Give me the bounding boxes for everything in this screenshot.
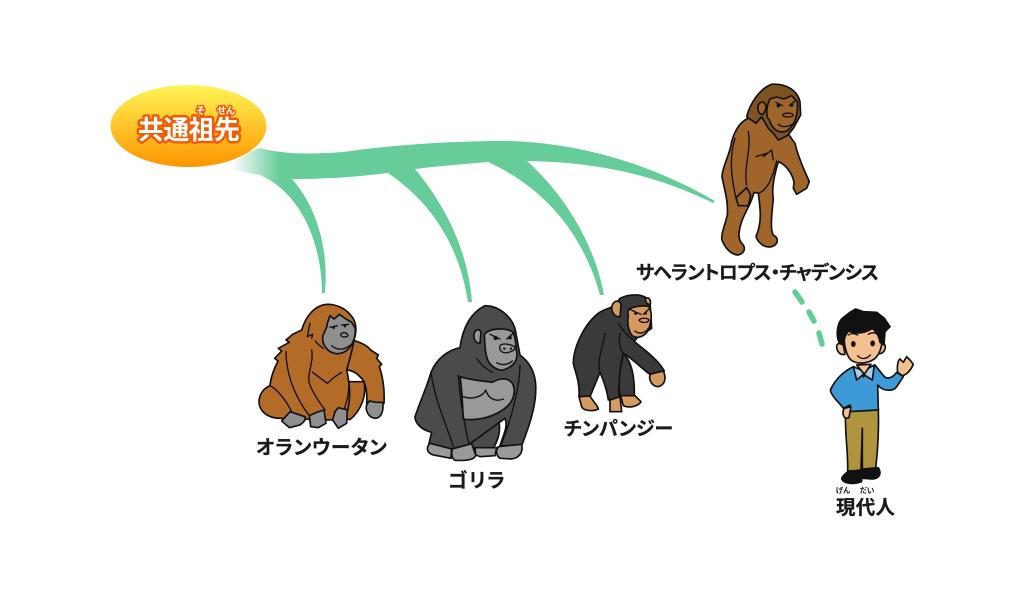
sahelanthropus label: サヘラントロプス・チャデンシス [636,261,879,284]
modern human [830,309,913,483]
gorilla [415,306,536,460]
chimpanzee [573,295,665,412]
dashed line to modern human [795,292,822,344]
phylogenetic tree branches [226,141,715,302]
orangutan label: オランウータン [256,437,387,459]
orangutan [259,304,384,428]
ancestor node [110,85,266,167]
modern human ruby 2: だい [860,486,875,495]
sahelanthropus [722,84,809,255]
modern human label: 現代人 [836,497,895,519]
modern human ruby 1: げん [836,485,851,495]
ancestor ruby 2: せん [217,106,236,117]
gorilla label: ゴリラ [448,469,505,492]
ancestor ruby: そ [196,106,205,117]
chimpanzee label: チンパンジー [564,418,673,440]
ancestor label: 共通祖先 [138,115,240,145]
